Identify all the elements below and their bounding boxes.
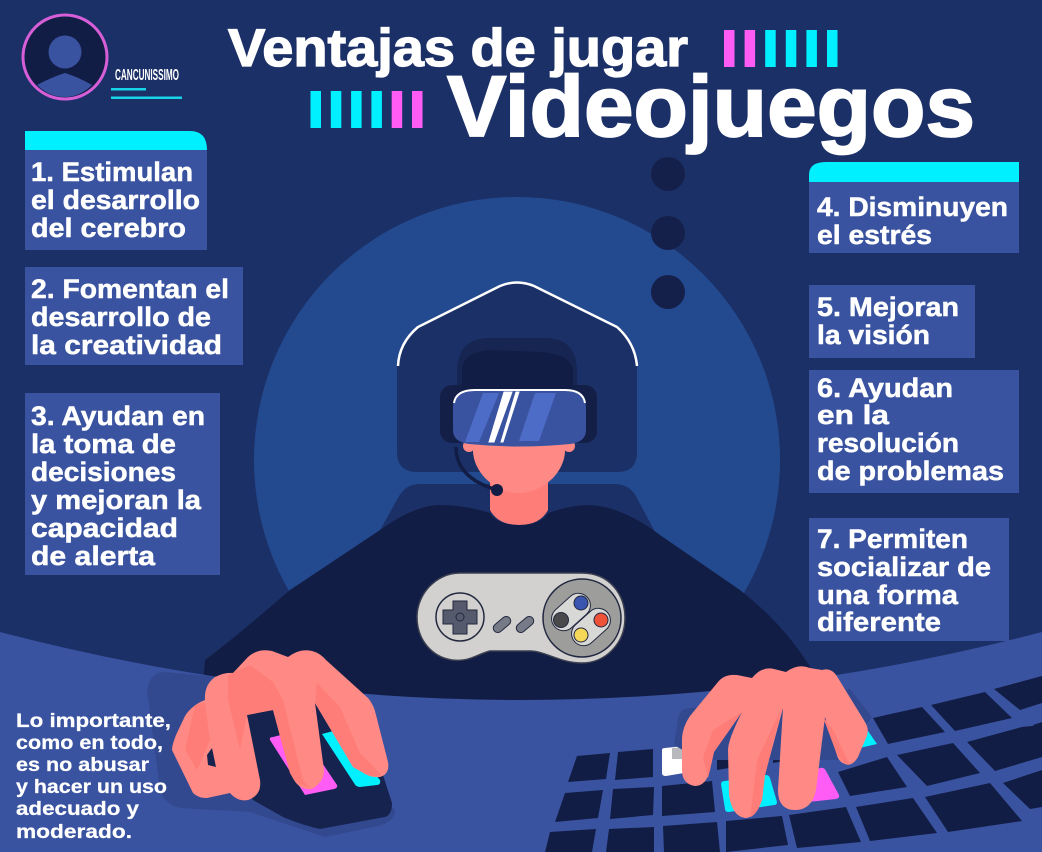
face — [473, 440, 565, 493]
panel: benefit 4 — [809, 162, 1019, 253]
stripes top — [724, 30, 838, 67]
panel: benefit 7: una forma — [817, 580, 959, 610]
panel: benefit 3: capacidad — [31, 513, 178, 543]
panel: benefit 6: en la — [817, 400, 890, 430]
finger shading — [703, 707, 850, 817]
stripes bottom — [310, 91, 422, 128]
neck — [490, 480, 548, 525]
panel: benefit 3: de alerta — [31, 541, 156, 571]
panel: benefit 5 — [809, 285, 975, 358]
chair headrest — [397, 282, 637, 472]
panel: benefit 1: el desarrollo — [31, 185, 200, 215]
hand shape — [172, 650, 388, 800]
panel: benefit 6 — [809, 370, 1019, 493]
panel: benefit 2: 2. Fomentan el — [31, 274, 229, 304]
vr goggles — [453, 389, 586, 446]
panel: benefit 3 — [25, 393, 220, 575]
panel: benefit 2 — [25, 267, 243, 365]
panel: benefit 1 — [25, 131, 207, 250]
panel: benefit 3: la toma de — [31, 429, 176, 459]
panel: benefit 7 — [809, 518, 1009, 641]
panel: benefit 7: diferente — [817, 607, 941, 637]
finger shading — [185, 665, 382, 788]
controller — [417, 573, 625, 663]
mouse — [225, 695, 392, 829]
thought dots — [651, 157, 685, 309]
panel: benefit 4: 4. Disminuyen — [817, 192, 1008, 222]
panel: benefit 1: del cerebro — [31, 213, 186, 243]
panel: benefit 5: la visión — [817, 320, 930, 350]
panel: benefit 3: y mejoran la — [31, 485, 202, 515]
microphone — [456, 447, 503, 496]
left hand and mouse — [147, 650, 395, 837]
note: adecuado y — [16, 798, 139, 820]
ears — [463, 440, 575, 452]
hand shape — [682, 666, 868, 818]
chair back — [380, 484, 662, 600]
hand shadow — [674, 689, 872, 760]
note: y hacer un uso — [16, 776, 167, 798]
logo: CANCUNISSIMO — [115, 67, 179, 84]
body — [200, 505, 812, 720]
keyboard — [545, 676, 1042, 852]
hair — [462, 350, 573, 400]
gap between fingers — [207, 748, 216, 767]
note — [16, 710, 171, 843]
panel: benefit 3: decisiones — [31, 457, 176, 487]
figure — [200, 338, 812, 720]
logo — [23, 15, 182, 99]
panel: benefit 6: 6. Ayudan — [817, 373, 953, 403]
title line 2: Videojuegos — [447, 59, 975, 155]
right hand — [674, 666, 872, 818]
headrest highlight — [398, 282, 637, 366]
ear cups — [440, 385, 597, 443]
panel: benefit 2: la creatividad — [31, 330, 222, 360]
panel: benefit 7: 7. Permiten — [817, 524, 968, 554]
note: como en todo, — [16, 732, 163, 754]
panel: benefit 2: desarrollo de — [31, 302, 211, 332]
background circle — [254, 197, 780, 723]
panel: benefit 6: resolución — [817, 428, 959, 458]
note: es no abusar — [16, 754, 149, 776]
panel: benefit 4: el estrés — [817, 220, 932, 250]
panel: benefit 6: de problemas — [817, 456, 1004, 486]
headset band — [457, 338, 577, 400]
panel: benefit 5: 5. Mejoran — [817, 292, 959, 322]
note: Lo importante, — [16, 710, 171, 732]
panel: benefit 3: 3. Ayudan en — [31, 401, 205, 431]
note: moderado. — [16, 821, 132, 843]
title line 1: Ventajas de jugar — [228, 19, 688, 78]
panel: benefit 7: socializar de — [817, 552, 991, 582]
table band — [0, 632, 1042, 852]
mouse shadow — [147, 672, 395, 837]
panel: benefit 1: 1. Estimulan — [31, 157, 193, 187]
